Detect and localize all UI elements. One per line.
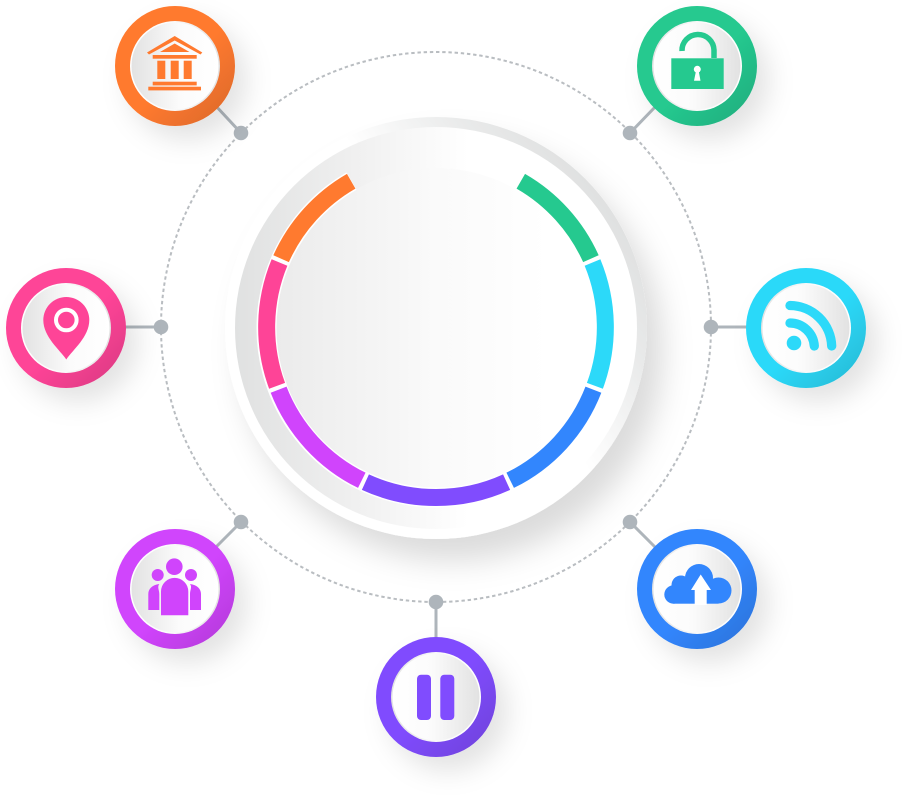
dial outer rim bbox=[225, 117, 647, 539]
connector: cyan bbox=[704, 320, 750, 334]
segment: green bbox=[521, 181, 591, 259]
connector: violet bbox=[429, 595, 443, 642]
node: cloud upload bbox=[637, 529, 757, 649]
icon: map pin bbox=[43, 297, 89, 360]
icon: people bbox=[148, 558, 201, 615]
central dial bbox=[204, 96, 668, 560]
connector: blue bbox=[623, 515, 657, 549]
arc white outline bbox=[204, 96, 668, 560]
icon: padlock bbox=[671, 34, 724, 89]
segment: cyan bbox=[592, 262, 605, 386]
segment: pink bbox=[267, 262, 280, 386]
segment: blue bbox=[510, 390, 593, 480]
node: open padlock bbox=[637, 6, 757, 126]
connector: pink bbox=[122, 320, 168, 334]
connector: green bbox=[623, 105, 657, 140]
connector: orange bbox=[215, 105, 248, 140]
node: pause bbox=[376, 637, 496, 757]
icon: bank building bbox=[147, 36, 202, 90]
node: people group bbox=[115, 529, 235, 649]
segmented colour arc bbox=[204, 96, 668, 560]
node: rss feed bbox=[746, 268, 866, 388]
dial face bbox=[235, 127, 637, 529]
icon: cloud with arrow bbox=[664, 564, 732, 605]
node: bank bbox=[115, 6, 235, 126]
connector: magenta bbox=[215, 515, 248, 548]
dotted orbit ring bbox=[161, 52, 711, 602]
icon: pause bars bbox=[417, 675, 454, 720]
icon: rss bbox=[787, 306, 832, 350]
segment: magenta bbox=[279, 390, 362, 480]
segment: violet bbox=[365, 482, 507, 498]
dial centre disc bbox=[276, 168, 596, 488]
node: map pin bbox=[6, 268, 126, 388]
segment: orange bbox=[281, 181, 351, 259]
